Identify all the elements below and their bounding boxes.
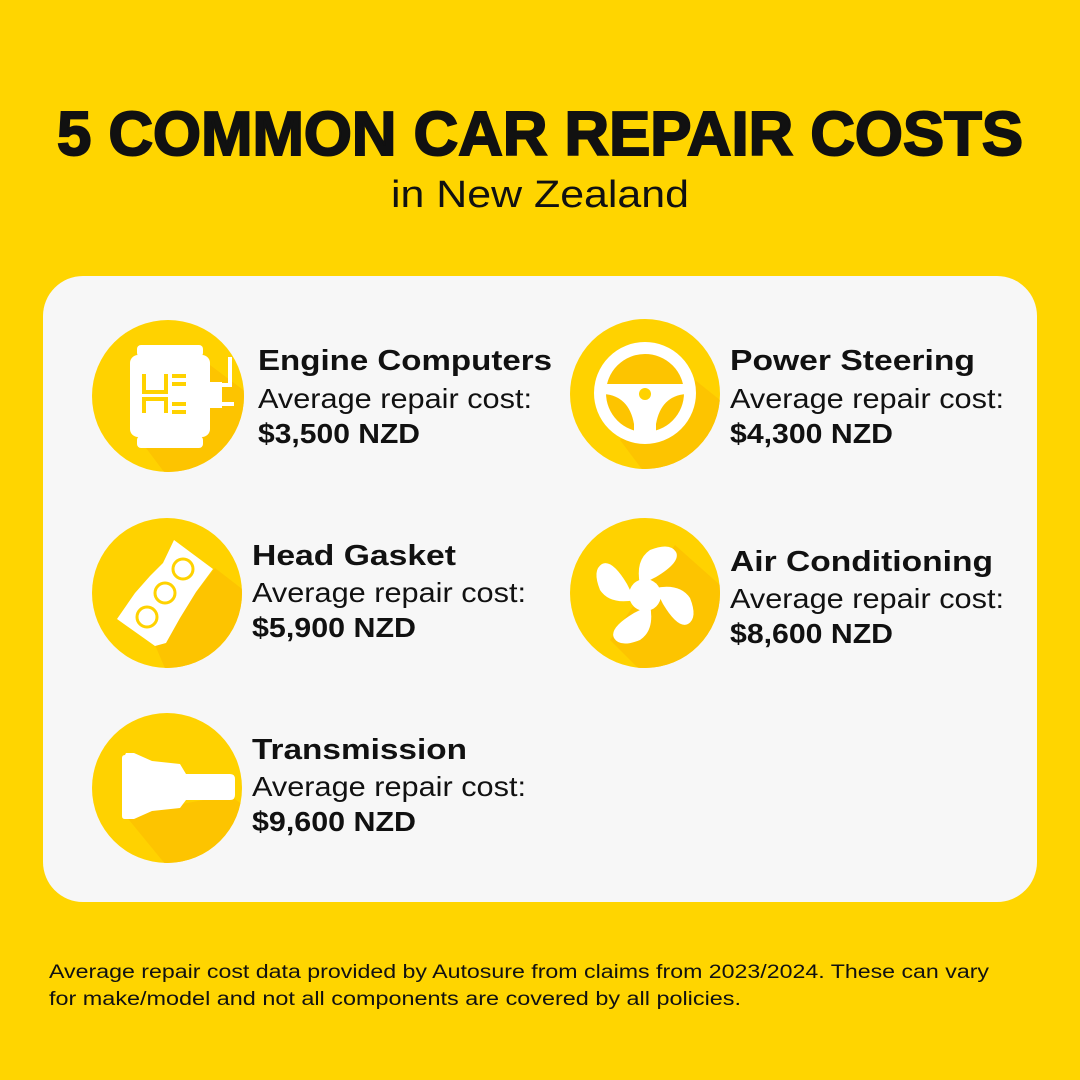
panel: repair costs — [43, 276, 1037, 902]
item: transmission: Transmission — [252, 734, 467, 766]
subtitle: in New Zealand — [391, 174, 689, 216]
item: air conditioning: Air Conditioning — [730, 546, 993, 578]
title: 5 COMMON CAR REPAIR COSTS — [57, 100, 1023, 169]
icon: transmission — [92, 713, 250, 870]
item: head gasket: Head Gasket — [252, 540, 456, 572]
item: head gasket — [252, 540, 526, 643]
item: head gasket: Average repair cost: — [252, 577, 526, 608]
icon: steering wheel — [570, 319, 720, 480]
item: transmission: $9,600 NZD — [252, 806, 416, 837]
item: power steering — [730, 345, 1004, 449]
icon: fan — [570, 518, 720, 680]
footer note: Average repair cost data provided by Autosure from claims from 2023/2024. These can vary — [49, 962, 990, 983]
item: transmission: Average repair cost: — [252, 771, 526, 802]
item: air conditioning: $8,600 NZD — [730, 618, 893, 649]
item: power steering: $4,300 NZD — [730, 418, 893, 449]
item: power steering: Power Steering — [730, 345, 975, 377]
item: power steering: Average repair cost: — [730, 383, 1004, 414]
item: engine computers: Average repair cost: — [258, 383, 532, 414]
icon: engine computer — [92, 320, 250, 480]
item: engine computers: $3,500 NZD — [258, 418, 420, 449]
item: engine computers: Engine Computers — [258, 345, 552, 377]
item: transmission — [252, 734, 526, 837]
item: engine computers — [258, 345, 552, 449]
footer note — [49, 962, 990, 1010]
footer note: for make/model and not all components are covered by all policies. — [49, 989, 741, 1010]
item: head gasket: $5,900 NZD — [252, 612, 416, 643]
item: air conditioning — [730, 546, 1004, 649]
icon: head gasket — [92, 518, 242, 668]
item: air conditioning: Average repair cost: — [730, 583, 1004, 614]
